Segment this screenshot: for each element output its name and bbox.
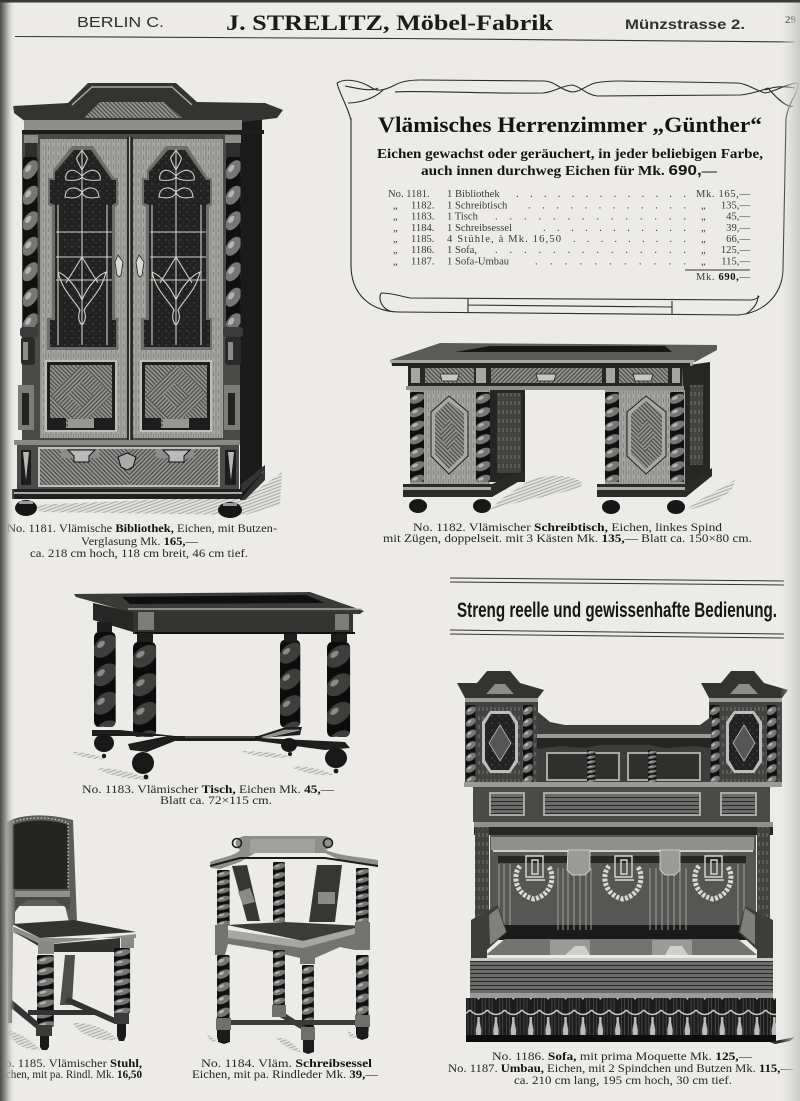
price table: 1 Schreibtisch xyxy=(447,200,508,212)
armchair seat xyxy=(227,922,365,941)
lower door panels xyxy=(45,360,117,432)
caption: No. 1185: No. 1185. Vlämischer Stuhl, xyxy=(0,1058,142,1070)
price table: . . . . . . . . . . . . xyxy=(528,200,686,212)
right door xyxy=(133,139,223,438)
header: company name: J. STRELITZ, Möbel-Fabrik xyxy=(226,10,554,35)
price table: 1 Schreibsessel xyxy=(447,223,512,234)
price table: 66,— xyxy=(726,234,750,245)
frame ornament xyxy=(337,80,798,315)
left pedestal front xyxy=(410,390,490,485)
price table: . . . . . . . . . . . xyxy=(543,223,686,234)
caption: No. 1181: Verglasung Mk. 165,— xyxy=(81,536,199,548)
header: rule xyxy=(15,36,795,42)
left pedestal side xyxy=(490,390,525,482)
price table: 1186. xyxy=(411,245,434,256)
chair back upholstery xyxy=(13,820,68,889)
lock escutcheons xyxy=(115,255,144,277)
price table: „ xyxy=(393,212,398,222)
table stretcher xyxy=(92,727,350,752)
back columns xyxy=(475,827,489,919)
table apron xyxy=(93,603,133,632)
illustration: corner chair No. 1184 xyxy=(206,836,378,1054)
right page edge shading xyxy=(780,0,800,1101)
caption: No. 1184: Eichen, mit pa. Rindleder Mk. 39,— xyxy=(192,1069,379,1081)
desk top xyxy=(390,343,717,362)
right glazing xyxy=(141,146,212,350)
price table: „ xyxy=(393,256,398,268)
header: address: Münzstrasse 2. xyxy=(625,16,745,32)
feet xyxy=(15,500,37,516)
sofa fringe xyxy=(466,998,795,1044)
caption: No. 1183: Blatt ca. 72×115 cm. xyxy=(160,795,272,807)
price table: 1 Sofa, xyxy=(447,245,477,256)
price table: 1184. xyxy=(411,223,434,234)
caption: No. 1186 and 1187: No. 1187. Umbau, Eichen, mit 2 Spindchen und Butzen Mk. 115,— xyxy=(448,1063,794,1075)
drawer handles xyxy=(68,450,95,462)
page header xyxy=(15,10,796,42)
panel: price list with art-nouveau frame: auch innen durchweg Eichen für Mk. 690, — xyxy=(421,162,718,179)
left door xyxy=(40,139,127,438)
top page edge xyxy=(0,0,800,2)
price table: . . . . . . . . . xyxy=(573,234,686,245)
caption: No. 1186 and 1187: ca. 210 cm lang, 195 cm hoch, 30 cm tief. xyxy=(514,1075,732,1087)
price table: 1 Bibliothek xyxy=(447,189,500,200)
price table: „ xyxy=(701,223,706,234)
price table: 1 Tisch xyxy=(447,212,479,222)
price table: . . . . . . . . . . . . . . xyxy=(495,212,686,222)
left top cabinet xyxy=(457,671,544,782)
price table: 4 Stühle, à Mk. 16,50 xyxy=(447,234,561,245)
price table: „ xyxy=(701,256,706,268)
caption: No. 1183: No. 1183. Vlämischer Tisch, Eichen Mk. 45,— xyxy=(82,784,335,796)
desk bases and feet xyxy=(403,468,712,514)
armchair back legs and splats xyxy=(273,862,285,922)
cornice xyxy=(13,83,283,122)
desk apron and drawers xyxy=(406,366,684,390)
illustration: bookcase No. 1181 xyxy=(12,83,283,518)
header: page number: 29 xyxy=(785,14,796,26)
caption: No. 1182: No. 1182. Vlämischer Schreibtisch, Eichen, linkes Spind xyxy=(413,522,722,534)
price list heading: Vlämisches Herrenzimmer „Günther“ xyxy=(378,112,762,137)
price table: 1 Sofa-Umbau xyxy=(447,256,510,268)
caption: No. 1186 and 1187 xyxy=(448,1051,794,1087)
caption: No. 1184 xyxy=(192,1058,379,1081)
price table: 45,— xyxy=(726,212,750,222)
price table xyxy=(388,189,750,283)
armrest crest xyxy=(210,836,378,869)
right top cabinet xyxy=(701,671,788,782)
table feet xyxy=(94,734,347,779)
price table: 1183. xyxy=(411,212,434,222)
sofa front rail xyxy=(470,961,773,993)
chair shadows xyxy=(8,1023,118,1050)
chair back rail xyxy=(15,891,70,897)
price table: „ xyxy=(701,245,706,256)
price table: Mk. 690,— xyxy=(696,272,750,283)
price table: 115,— xyxy=(721,256,750,268)
price table: „ xyxy=(701,212,706,222)
price table: 125,— xyxy=(721,245,750,256)
caption: No. 1182 xyxy=(383,522,752,545)
medallions xyxy=(516,856,731,899)
price table: „ xyxy=(393,223,398,234)
price list subheading: Eichen gewachst oder geräuchert, in jeder beliebigen Farbe, xyxy=(377,146,763,161)
cabinet front xyxy=(22,134,240,440)
illustration: chair No. 1185 xyxy=(7,815,136,1050)
binding gutter shadow xyxy=(0,0,15,1101)
right pedestal side xyxy=(682,362,710,490)
price table: . . . . . . . . . . . . . xyxy=(516,189,686,200)
sofa seat xyxy=(486,939,757,955)
right twisted column xyxy=(223,135,243,430)
price table: „ xyxy=(393,234,398,245)
illustration: table No. 1183 xyxy=(72,592,364,780)
right pedestal front xyxy=(605,390,685,485)
price table: „ xyxy=(701,200,706,212)
price table: Mk. 165,— xyxy=(696,189,750,200)
floor shadow xyxy=(35,472,282,515)
caption: No. 1185: Eichen, mit pa. Rindl. Mk. 16,50 xyxy=(0,1069,142,1081)
caption: No. 1186 and 1187: No. 1186. Sofa, mit prima Moquette Mk. 125, — xyxy=(492,1051,753,1063)
price table: „ xyxy=(393,200,398,212)
caption: No. 1182: mit Zügen, doppelseit. mit 3 Kästen Mk. 135, — Blatt ca. 150×80 cm. xyxy=(383,533,752,545)
caption: No. 1181 xyxy=(7,523,277,560)
armchair legs xyxy=(216,868,370,1054)
price table: 39,— xyxy=(726,223,750,234)
price table: „ xyxy=(701,234,706,245)
side of the cabinet xyxy=(240,118,262,500)
illustration: desk No. 1182 xyxy=(390,343,735,514)
price table: 1182. xyxy=(411,200,434,212)
table top xyxy=(74,592,364,614)
left twisted column xyxy=(18,135,38,430)
table shadows xyxy=(72,751,335,780)
caption: No. 1185 xyxy=(0,1058,142,1081)
header: city: BERLIN C. xyxy=(77,14,164,31)
panel: price list with art-nouveau frame xyxy=(337,80,798,315)
chair seat xyxy=(12,920,136,938)
price table: „ xyxy=(393,245,398,256)
sofa back upholstery xyxy=(490,835,756,940)
armchair shadows xyxy=(206,1030,358,1053)
price table: 1187. xyxy=(411,256,434,268)
caption: No. 1183 xyxy=(82,784,335,807)
lower drawer section xyxy=(12,440,265,518)
price table: No. 1181. xyxy=(388,189,430,200)
chair legs xyxy=(10,937,134,1050)
price table: 1185. xyxy=(411,234,434,245)
slogan band xyxy=(450,578,784,638)
middle frieze xyxy=(464,782,782,835)
centre shelf section xyxy=(537,712,712,782)
illustration: sofa No. 1186 with superstructure No. 1187 xyxy=(457,671,795,1044)
chair rear posts and frame xyxy=(7,815,77,1023)
price table: 135,— xyxy=(721,200,750,212)
price table: . . . . . . . . . . . xyxy=(535,256,686,268)
desk floor shadow xyxy=(490,476,735,510)
sofa armrests xyxy=(471,905,507,958)
caption: No. 1181: ca. 218 cm hoch, 118 cm breit, 46 cm tief. xyxy=(30,548,248,560)
caption: No. 1184: No. 1184. Vläm. Schreibsessel xyxy=(201,1058,372,1070)
price table: . . . . . . . . . . . . . . xyxy=(495,245,686,256)
left glazing xyxy=(47,146,118,350)
table legs xyxy=(94,622,350,737)
caption: No. 1181: No. 1181. Vlämische Bibliothek, Eichen, mit Butzen- xyxy=(7,523,277,535)
